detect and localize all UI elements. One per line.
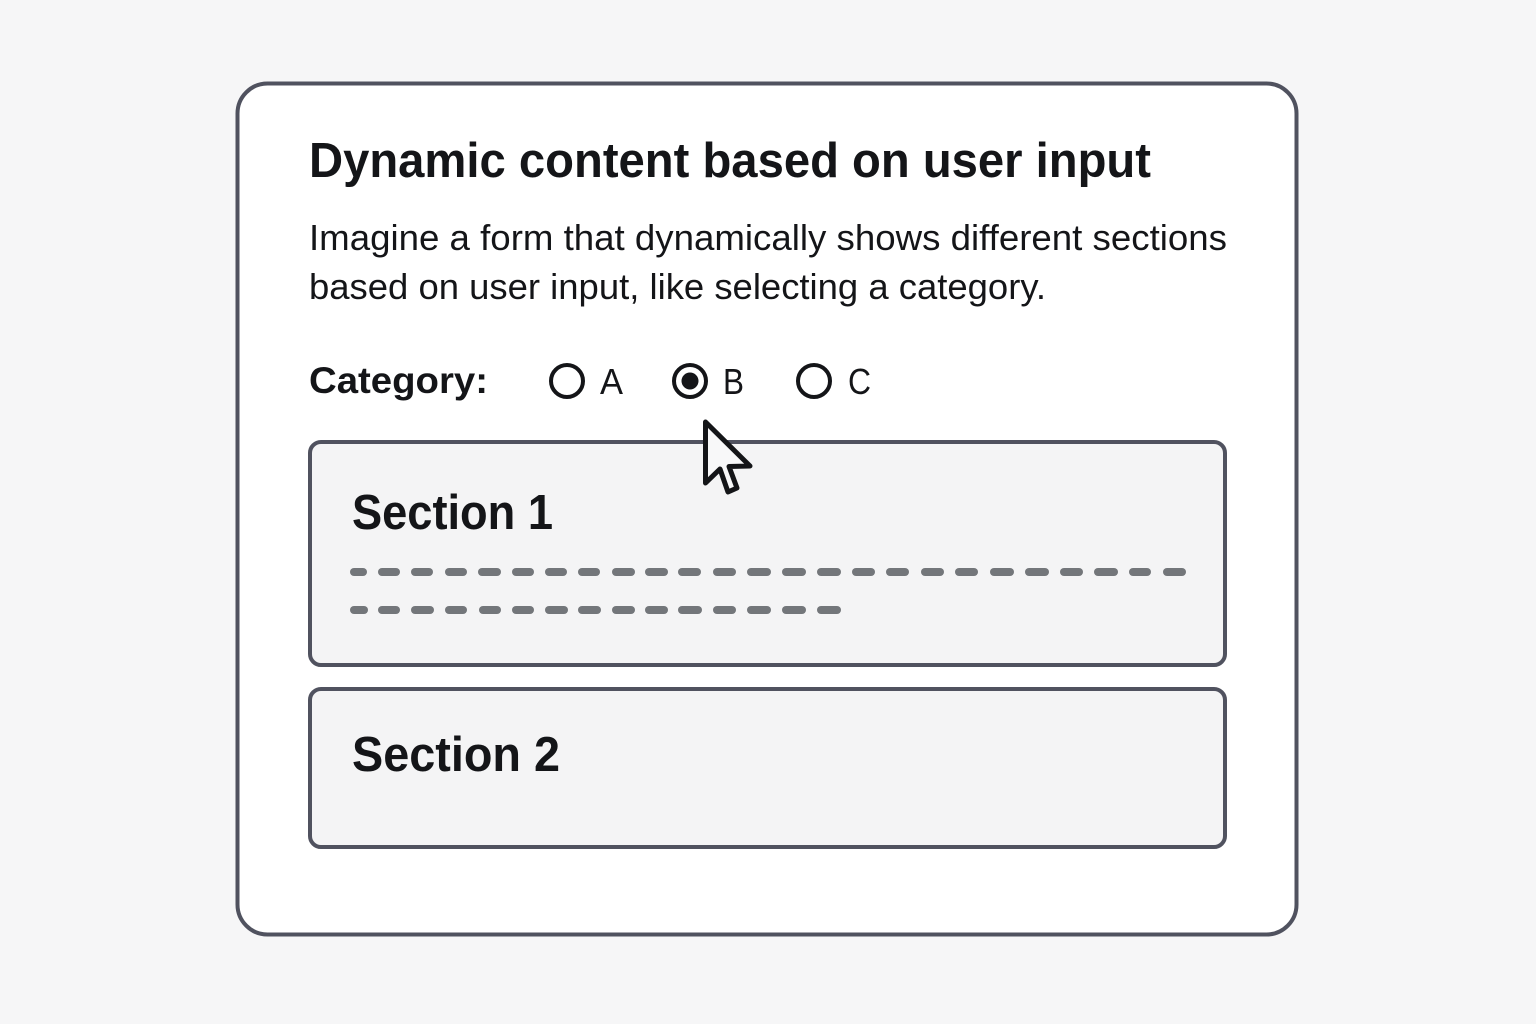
placeholder text line 2	[350, 606, 841, 614]
icon: mouse cursor	[706, 422, 750, 492]
radio option B selected	[674, 361, 744, 402]
radio option A	[551, 361, 623, 402]
section 1 heading: Section 1	[352, 486, 553, 540]
panel: section 2	[310, 689, 1225, 847]
description text	[309, 217, 1227, 307]
description text: based on user input, like selecting a category.	[309, 266, 1046, 307]
radio option A: A	[600, 361, 623, 402]
radio option C	[798, 361, 871, 402]
placeholder text line 1	[350, 568, 1186, 576]
radio option B selected: B	[723, 361, 744, 402]
panel: form card	[238, 84, 1296, 934]
panel: section 1	[310, 442, 1225, 665]
radio option C: C	[848, 361, 871, 402]
description text: Imagine a form that dynamically shows different sections	[309, 217, 1227, 258]
title: Dynamic content based on user input	[309, 134, 1151, 188]
section 2 heading: Section 2	[352, 728, 560, 782]
category label: Category:	[309, 360, 488, 401]
